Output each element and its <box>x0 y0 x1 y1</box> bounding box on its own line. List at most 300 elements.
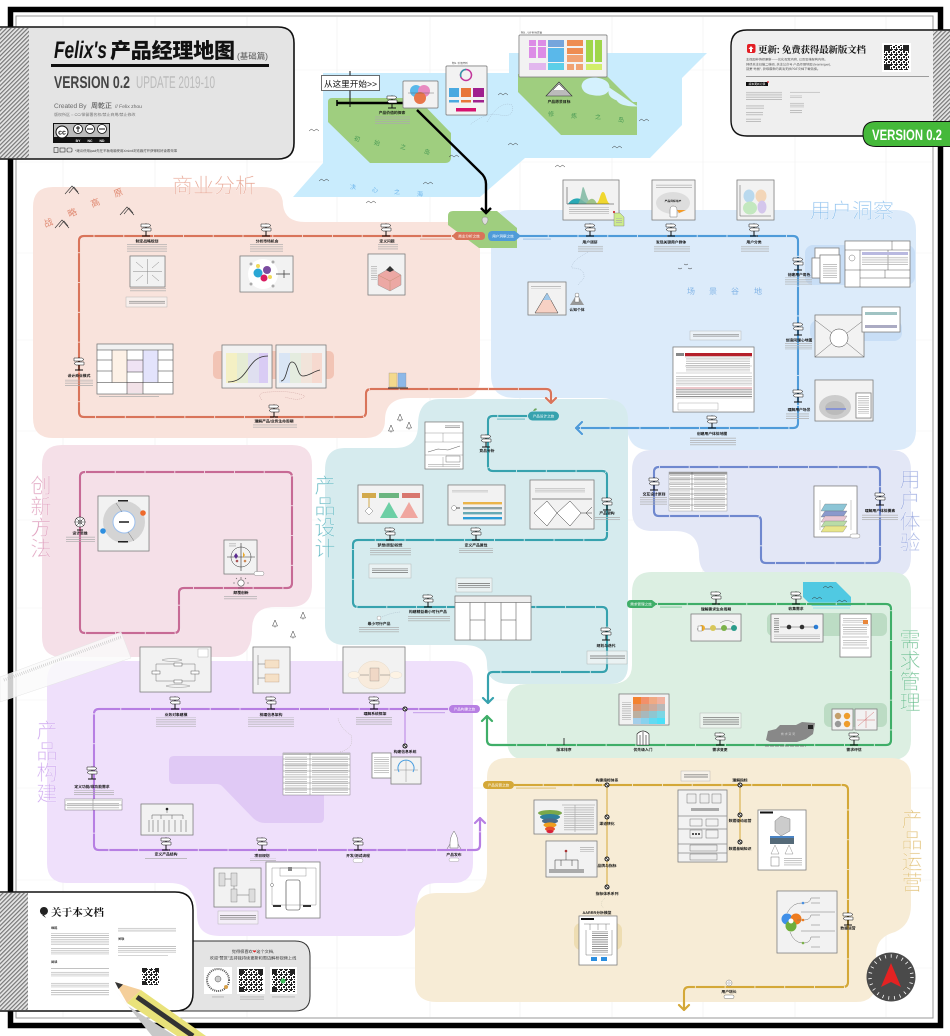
station: product architecture <box>595 498 620 521</box>
route line: design <box>353 416 607 703</box>
island: start island <box>328 98 451 163</box>
panel: donate <box>150 941 310 1011</box>
tag: 版本更新记录 <box>749 82 766 86</box>
cc badge <box>53 123 110 143</box>
station: product structure <box>145 838 187 859</box>
station: requirement lifecycle: 理解需求生命周期 <box>701 606 731 612</box>
region: user experience <box>632 450 911 577</box>
cc badge: cc <box>58 130 66 136</box>
heading: operations: 运 <box>902 851 922 874</box>
card: information architecture <box>253 647 290 693</box>
label: scene valley: 地 <box>754 287 762 296</box>
icons: birds <box>678 264 692 269</box>
station: define problem <box>378 224 398 250</box>
card: product attributes <box>448 485 505 525</box>
device hint: *建议使用ipad先在平板电脑使用Xmind浏览器打开获得较好查看效果 <box>75 149 178 153</box>
station: product release: 产品发布 <box>446 852 462 857</box>
label: start island <box>353 134 431 157</box>
station labels: metrics: 渠道转化 <box>599 821 615 826</box>
dots on branch <box>403 707 407 748</box>
heading: user experience: 户 <box>900 490 920 513</box>
waves <box>309 93 649 203</box>
heading: product build <box>36 720 58 806</box>
heading: innovation methods <box>30 475 52 561</box>
section: business analysis <box>42 175 556 432</box>
patch: evaluation backdrop <box>824 703 887 727</box>
station: cognitive individual: 认知个体 <box>569 307 585 312</box>
card: priority matrix <box>619 694 669 725</box>
card: maslow pyramid <box>528 282 566 315</box>
station: cognitive individual <box>569 293 585 312</box>
station: iteration <box>597 628 616 648</box>
card: info doc <box>372 753 391 778</box>
station: collect requirements: 收集需求 <box>788 606 804 611</box>
icon: documents <box>388 373 408 388</box>
about text right: 关联 <box>118 937 125 941</box>
station labels: metrics: 指标体系系列 <box>596 891 619 896</box>
region: requirements management <box>507 572 911 760</box>
card: product five elements grid <box>519 30 607 77</box>
badge: operations start: 产品运营之旅 <box>488 782 510 788</box>
about text left: 缘起 <box>51 926 58 930</box>
patch: aarrr backdrop <box>574 923 622 950</box>
heading: user insight: 用户洞察 <box>810 200 894 223</box>
card: double diamond <box>530 480 594 529</box>
label: start island: 之 <box>399 142 407 152</box>
station: journey map <box>690 416 736 446</box>
station: product value <box>375 110 410 124</box>
station: priority gate: 优先级入门 <box>634 747 653 752</box>
label: scene valley <box>687 287 762 296</box>
card: experience layers <box>814 486 857 537</box>
card: competitor wireframe <box>425 422 463 469</box>
station: mvp <box>408 594 450 622</box>
donate text: 欢迎“赞赏”支持我持续更新和周边解析视频上线 <box>210 956 297 960</box>
dark purple patch <box>169 756 324 823</box>
start pole <box>349 71 351 107</box>
station: data operations <box>840 912 856 930</box>
label: scene valley: 景 <box>709 287 717 296</box>
card: lean canvas <box>455 596 531 640</box>
label: start island: 岛 <box>423 147 431 157</box>
card: system framework <box>343 647 405 693</box>
station: functional requirements: 定义功能/非功能需求 <box>74 784 110 789</box>
station: competitor analysis: 竞品分析 <box>479 448 495 453</box>
patch: collect backdrop <box>767 613 887 636</box>
route line: build <box>94 709 485 850</box>
station: functional requirements <box>74 766 114 796</box>
card: value process <box>446 61 487 115</box>
label: training island: 岛 <box>618 116 624 124</box>
card: aarrr flow <box>579 916 617 965</box>
card: project plan flow <box>214 868 261 907</box>
station: strategic planning <box>127 224 167 253</box>
update text: 主视图非持续更新——优化视觉内容, 以及思维架构内容。 <box>746 58 827 62</box>
card: journey map <box>673 347 754 412</box>
station: dimensions: 梦想/原型/视觉 <box>378 542 403 548</box>
patch: persona backdrop <box>805 245 915 285</box>
station: key user groups: 发现关键用户群体 <box>656 240 686 244</box>
device hint <box>54 148 178 153</box>
badge: requirements start <box>627 600 682 608</box>
badge: operations start <box>483 781 556 789</box>
pin: central marker <box>482 217 488 225</box>
station: user research <box>578 224 603 252</box>
badge: build start: 产品构建之旅 <box>454 706 476 712</box>
badge: business journey start: 商业分析之旅 <box>458 234 480 238</box>
tile: qr one <box>237 967 265 994</box>
station labels: metrics: 构建指标体系 <box>596 778 619 782</box>
hatch strip <box>0 893 28 1010</box>
donate text: 觉得很喜欢❤这个文档, <box>232 949 274 954</box>
divider <box>746 75 929 78</box>
dotted trail <box>572 252 588 285</box>
card: dimension triangles <box>358 485 423 523</box>
signpost: product value <box>387 96 397 108</box>
station: product structure: 定义产品结构 <box>155 852 178 856</box>
heading: innovation methods: 法 <box>30 538 52 561</box>
branch lines <box>607 785 740 887</box>
icons: trees <box>272 612 306 638</box>
label: strategy plateau: 高 <box>89 197 101 209</box>
about title: 关于本文档 <box>51 905 104 920</box>
station: market opportunity: 分析市场机会 <box>256 238 279 244</box>
card: metric tree <box>546 841 597 877</box>
note: strategy quote <box>126 297 167 307</box>
heading: innovation methods: 方 <box>30 517 52 540</box>
station: experience elements: 理解用户体验要素 <box>865 508 895 513</box>
badge: build start <box>413 705 480 713</box>
station: empathy map: 创造同理心地图 <box>786 338 812 342</box>
card: venn tree <box>777 891 837 953</box>
card: metric layers <box>678 790 727 862</box>
station: user growth <box>721 980 737 998</box>
card: market venn <box>240 256 293 292</box>
dotted trail <box>260 392 305 400</box>
station: requirement evaluation <box>846 732 862 752</box>
card: product five elements grid: 附3. 八步市场方案 <box>521 30 542 34</box>
cc badge: BY <box>76 139 81 143</box>
heading: product design: 设 <box>314 517 336 540</box>
title text: (基础篇) <box>237 51 268 61</box>
heading: requirements: 求 <box>900 650 920 673</box>
station: project plan <box>250 838 276 862</box>
station: product architecture: 产品架构 <box>599 510 615 516</box>
region: innovation methods <box>42 445 312 657</box>
station: requirement lifecycle <box>701 592 731 612</box>
station: mvp: 构建精益最小可行产品 <box>409 609 447 614</box>
section: requirements management <box>482 582 920 752</box>
panel: about this document <box>0 892 193 1011</box>
tile: avatar code <box>204 967 232 994</box>
station labels: metrics: 数据基础知识 <box>729 846 752 851</box>
map start area: islands and start route <box>309 30 649 248</box>
title text: 产品经理地图 <box>110 35 235 65</box>
icon: green note <box>613 211 624 226</box>
station: minimum lovable <box>359 612 400 633</box>
label: training island: 修 <box>548 110 554 118</box>
station labels: metrics: 数据驱动运营 <box>729 818 752 823</box>
station: user scenario <box>786 390 811 419</box>
update text: 持续关注扫描二维码, 关注公众号 产品经理地图 (learningxe), <box>746 62 831 66</box>
label: strategy plateau: 略 <box>66 207 78 219</box>
patch: empathy backdrop <box>810 320 902 341</box>
station: dimensions <box>370 528 411 556</box>
qr code <box>882 43 911 72</box>
cc badge: ND <box>100 139 105 143</box>
heading: user experience: 用 <box>900 469 920 492</box>
update text: 回复"地图", 获取最新的高清无损PDF文档下载链接。 <box>746 67 820 71</box>
heading: product design: 计 <box>314 538 336 561</box>
about text right <box>118 927 176 957</box>
station: interaction principles: 交互设计原则 <box>643 492 666 496</box>
note: mvp quote <box>456 578 492 592</box>
table: requirements <box>65 799 122 810</box>
start route line <box>337 103 491 213</box>
version badge <box>863 122 950 146</box>
station: create persona: 创建用户角色 <box>788 272 811 277</box>
station: product release <box>446 852 462 862</box>
island: lake and river <box>582 78 637 106</box>
heading: user experience: 体 <box>900 511 920 534</box>
note: design quote <box>369 564 411 578</box>
panel: title <box>0 27 294 159</box>
region: product design <box>325 399 628 684</box>
panel: update <box>731 30 950 146</box>
heading: requirements: 需 <box>900 629 920 652</box>
label: start island: 初 <box>353 134 361 144</box>
icons: trees <box>388 414 412 432</box>
label: start island: 始 <box>373 138 381 148</box>
badge: arrow end of business <box>523 238 551 240</box>
heading: product build: 建 <box>36 783 58 806</box>
station labels: metrics: 理解指标 <box>732 778 748 782</box>
badge note <box>420 238 452 240</box>
lake: requirement pool <box>803 582 851 608</box>
heading: product build: 构 <box>36 762 58 785</box>
region: product build <box>47 661 473 936</box>
card: swot <box>130 256 166 292</box>
heading: business analysis: 商业分析 <box>172 175 256 198</box>
station: market opportunity <box>250 224 283 252</box>
license text: 版权所区 – CC/保留署名权/禁止商用/禁止修改 <box>54 112 136 117</box>
icons: mountains <box>55 186 134 228</box>
label: scene valley: 场 <box>687 287 695 296</box>
station: system framework <box>356 696 392 726</box>
heading: operations: 产 <box>902 809 922 832</box>
region: product operations <box>415 758 911 1002</box>
label: decision sea: 之 <box>394 188 400 196</box>
card: phone flow <box>266 862 320 918</box>
card: data cube <box>758 810 806 870</box>
island: central green station <box>448 211 517 248</box>
start marker base <box>336 100 338 106</box>
station: requirement change <box>712 732 728 752</box>
heading: requirements <box>900 629 920 715</box>
card: hype curve <box>276 345 326 388</box>
card: pink box <box>368 254 405 295</box>
card: product value venn <box>403 81 438 108</box>
station: version number: 版本排序 <box>556 747 572 752</box>
station: interaction principles <box>640 478 667 506</box>
card: empathy map <box>815 315 864 357</box>
card: pains and gains <box>862 307 900 332</box>
curve backdrop <box>213 351 334 379</box>
station: system framework: 理解系统框架 <box>364 711 387 716</box>
badge: design journey start <box>497 408 559 420</box>
heading: product design <box>314 475 336 561</box>
section: product design <box>314 408 627 703</box>
note: iteration quote <box>587 651 627 664</box>
route line: user <box>518 236 798 434</box>
heading: requirements: 理 <box>900 692 920 715</box>
badge: user journey start <box>488 231 521 241</box>
station: dev and test <box>346 838 370 862</box>
branch dots <box>605 783 742 889</box>
heading: operations <box>902 809 922 895</box>
donate text <box>210 949 297 960</box>
station: disruptive innovation: 颠覆创新 <box>233 590 249 595</box>
station: business object modeling: 业务对象建模 <box>165 712 188 717</box>
branch line <box>404 709 406 746</box>
card: user segments <box>737 180 774 220</box>
icon: design thinking flower <box>74 516 86 530</box>
heading: product build: 品 <box>36 741 58 764</box>
badge: business journey start <box>452 232 485 240</box>
title text: Felix's <box>54 37 107 64</box>
label: training island <box>548 110 624 124</box>
dotted trail <box>601 898 605 908</box>
title text <box>54 35 268 65</box>
section: user experience <box>640 467 920 563</box>
card: business model canvas <box>97 344 173 397</box>
badge: design journey start: 产品设计之旅 <box>533 414 555 418</box>
station labels: metrics: 品牌与指标 <box>598 863 617 868</box>
card: design thinking wheel <box>98 496 149 551</box>
station: collect requirements <box>788 592 804 611</box>
route line: innovation <box>80 472 292 633</box>
about qr <box>142 968 159 985</box>
station: version number <box>556 738 572 752</box>
heading: operations: 营 <box>902 872 922 895</box>
icon: rocket <box>447 831 461 849</box>
station: data operations: 数据运营 <box>840 926 856 930</box>
station: requirement change: 需求变更 <box>712 747 728 752</box>
tile: qr two <box>270 967 297 994</box>
author: Created By <box>54 103 87 110</box>
heading: operations: 品 <box>902 830 922 853</box>
card: entity relationship <box>140 647 211 692</box>
tag <box>850 534 860 538</box>
card: value process: 附2. 价值分析 <box>452 61 468 65</box>
station: user growth: 用户增长 <box>721 989 737 994</box>
station: iteration: 规划与迭代 <box>597 643 616 648</box>
card: key user groups: 产品目标用户 <box>665 199 682 203</box>
card: requirement sources <box>771 614 823 642</box>
card: user research <box>563 180 619 220</box>
rule under title <box>51 64 269 67</box>
tag <box>254 572 264 576</box>
card: persona papers <box>812 248 840 283</box>
icon: red update <box>747 44 756 53</box>
label: decision sea <box>350 183 423 198</box>
dotted trail <box>338 718 352 752</box>
region: user insight <box>491 210 916 450</box>
ruler <box>0 632 131 702</box>
station: requirement evaluation: 需求评估 <box>846 747 862 752</box>
badge: requirements start: 需求管理之旅 <box>630 602 652 606</box>
region: business analysis <box>33 187 480 438</box>
heading: requirements: 管 <box>900 671 920 694</box>
icon: compass <box>866 952 916 1002</box>
station: user scenario: 理解用户场景 <box>788 407 811 412</box>
station: journey map: 创建用户体验地图 <box>697 431 727 436</box>
station: experience elements <box>862 492 898 521</box>
section: product build <box>36 647 485 924</box>
card: adoption curve <box>222 345 272 388</box>
station: user segmentation <box>741 224 769 252</box>
start box <box>322 76 380 90</box>
station: product lifecycle <box>253 404 297 428</box>
card: funnel <box>534 800 597 834</box>
author: 周乾正 <box>91 102 112 110</box>
heading: innovation methods: 创 <box>30 475 52 498</box>
card: disruptive quadrant <box>224 540 257 574</box>
cc badge: NC <box>88 139 93 143</box>
station: business object modeling <box>156 696 196 726</box>
icon: mountain product vision <box>546 82 572 104</box>
author <box>54 102 142 110</box>
table: interaction principles <box>669 472 727 511</box>
icon: gate <box>637 731 649 745</box>
station: user research: 用户调研 <box>582 240 598 244</box>
note: change quote <box>700 713 741 728</box>
station: product attributes <box>459 528 493 553</box>
icon: lightbulb <box>233 577 249 588</box>
label: training island: 炼 <box>571 112 577 120</box>
region: decision sea <box>293 53 707 197</box>
card: info chart <box>391 757 421 784</box>
station: information architecture: 梳理信息架构 <box>260 712 283 717</box>
station: key user groups <box>654 224 690 252</box>
heading: product design: 品 <box>314 496 336 519</box>
note: journey quote <box>690 331 741 340</box>
station: design thinking <box>66 530 95 542</box>
station labels: metrics <box>596 778 752 896</box>
station: business model: 设计商业模式 <box>68 373 91 378</box>
island: training island <box>518 74 637 135</box>
label: decision sea: 心 <box>372 187 378 194</box>
route line: requirements <box>482 604 891 745</box>
card: eval matrix 1 <box>832 709 853 730</box>
station: design thinking: 设计思维 <box>72 530 88 536</box>
card: user scenario <box>815 380 873 421</box>
update title: 更新: 免费获得最新版文档 <box>758 42 866 56</box>
station: disruptive innovation <box>224 590 257 600</box>
update list <box>746 91 820 122</box>
about icon <box>40 907 48 918</box>
card: lifecycle flow <box>691 614 741 641</box>
version line <box>54 73 215 92</box>
version line: VERSION 0.2 <box>54 73 130 92</box>
card: requirements doc <box>840 614 871 657</box>
card: key user groups <box>652 180 695 220</box>
station: minimum lovable: 最小可行产品 <box>368 621 391 626</box>
card: persona table <box>845 241 910 287</box>
label: decision sea: 决 <box>350 183 356 191</box>
station: information architecture <box>248 696 294 726</box>
table: framework details <box>283 753 350 795</box>
